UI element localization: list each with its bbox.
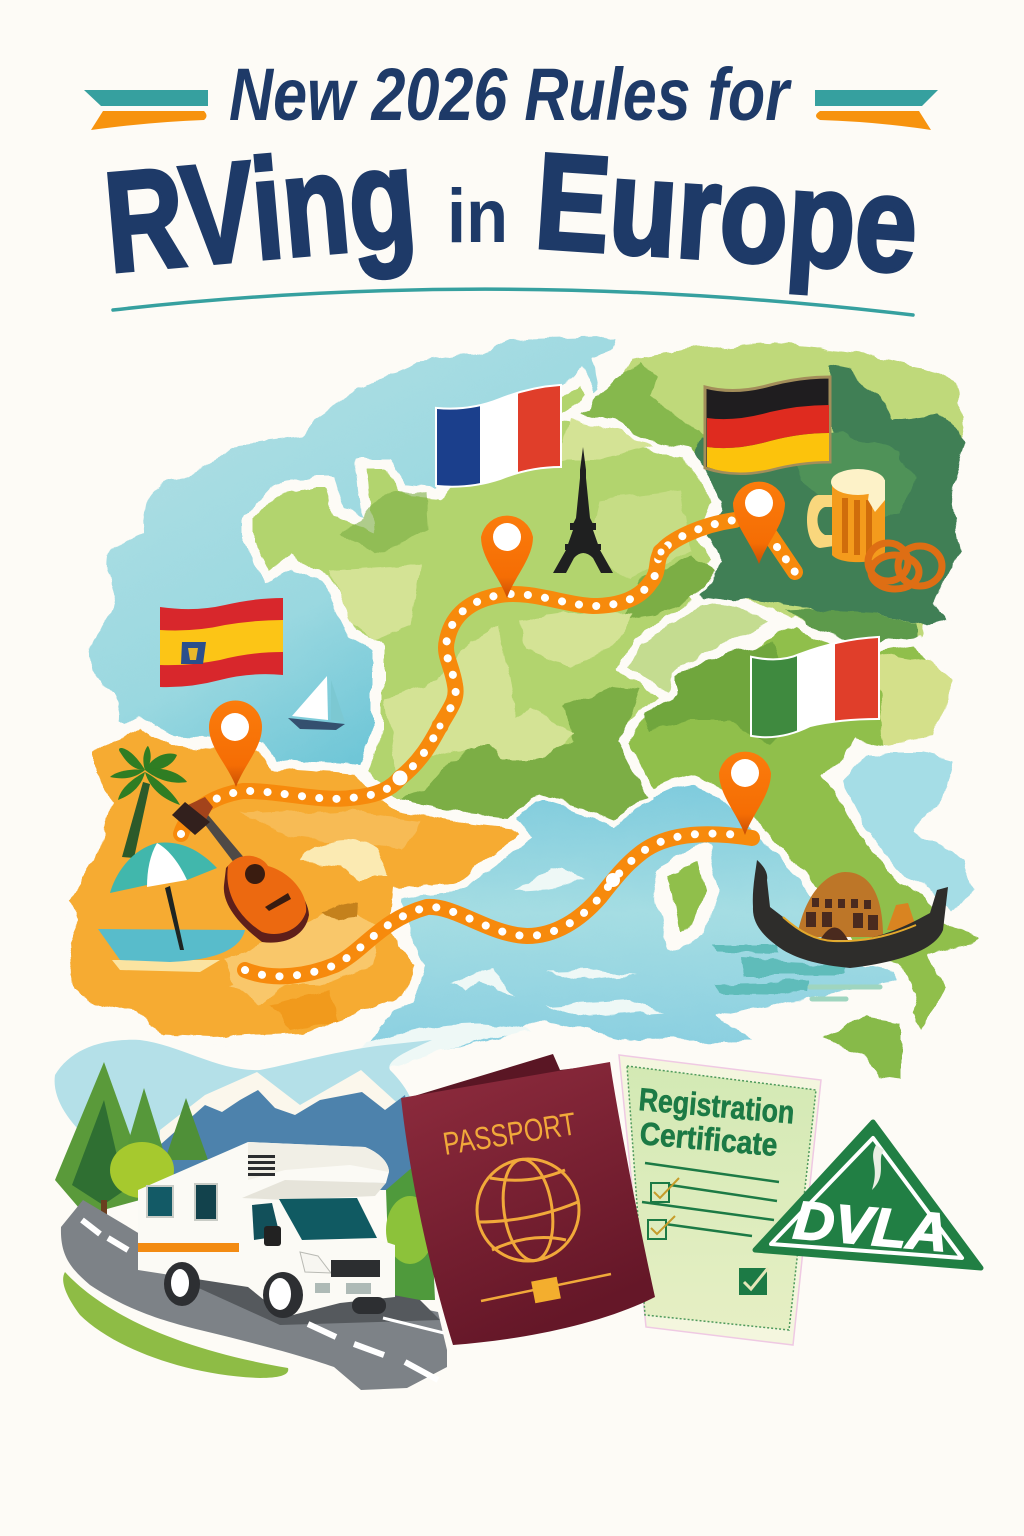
route: Spain to Germany: [181, 520, 735, 834]
pin: Germany: [733, 482, 785, 564]
infographic canvas: [54, 66, 984, 1390]
DVLA badge: [755, 1122, 981, 1268]
icon: sailboat: [288, 676, 345, 730]
camper door window: [252, 1203, 280, 1240]
certificate checkboxes: [648, 1178, 679, 1239]
Corsica: [660, 850, 712, 945]
certificate lines: [642, 1163, 779, 1236]
ribbon: right: [815, 90, 938, 130]
trees behind passport: [386, 1165, 435, 1300]
icon: gondola and colosseum: [753, 860, 948, 968]
land: France: [250, 377, 717, 826]
title underline: [113, 289, 913, 315]
land: Spain: [62, 722, 525, 1042]
registration certificate: [619, 1055, 821, 1345]
ribbon: left: [84, 90, 208, 130]
sky blob: [55, 1040, 432, 1190]
icon: Eiffel Tower: [553, 447, 613, 573]
icon: palm tree: [110, 746, 187, 858]
flag: Germany: [705, 377, 830, 474]
sea foam shapes: [350, 868, 665, 1075]
camper roof shade: [248, 1142, 389, 1180]
grass verge: [63, 1272, 288, 1378]
map of Europe: [62, 337, 987, 1080]
route: Germany tail: [770, 535, 795, 572]
icon: pretzels: [868, 543, 942, 589]
heading: in: in: [447, 174, 508, 259]
sea: north west: [90, 337, 617, 780]
icon: globe: [477, 1156, 579, 1264]
mountains: [160, 1070, 420, 1190]
Sicily: [823, 1017, 900, 1080]
camper side window: [195, 1184, 217, 1220]
Italy: dark green: [643, 640, 800, 745]
teal water streaks: [712, 945, 850, 993]
waves under gondola: [810, 987, 880, 999]
land: north mid green: [575, 362, 705, 458]
certificate stamp: [739, 1268, 768, 1295]
camper vent: [248, 1155, 275, 1176]
camper headlight: [300, 1252, 331, 1273]
route: Spain coast to Italy: [245, 834, 752, 976]
passport label: PASSPORT: [440, 1105, 578, 1162]
heading: RVing: RVing: [99, 117, 422, 303]
Italy: pale right region: [877, 653, 955, 745]
title block: [84, 53, 938, 315]
trees: [55, 1062, 208, 1224]
pin: Spain: [209, 701, 262, 787]
camper far wheel: [352, 1297, 386, 1314]
Spain: pale cloud: [300, 841, 390, 877]
camper front wheel: [263, 1272, 303, 1318]
Spain: darker orange patch: [270, 990, 340, 1030]
badge text: DVLA: [791, 1190, 951, 1263]
pin: France: [481, 516, 533, 598]
map land and sea shapes: [62, 337, 987, 1080]
camper mirror: [264, 1226, 281, 1246]
heading: Europe: Europe: [531, 124, 922, 301]
land: Italy: [623, 622, 987, 1040]
camper grille: [331, 1260, 380, 1277]
camper body: [138, 1142, 395, 1317]
sea: adriatic: [840, 753, 973, 910]
Spain: light sand patches: [225, 810, 420, 1005]
land: Alpine pale region: [623, 600, 775, 697]
land: northern region: [575, 340, 967, 655]
land: Germany dark forest: [690, 365, 967, 628]
passport: [401, 1054, 655, 1345]
camper orange stripe: [138, 1243, 239, 1252]
flag: Spain: [160, 598, 283, 687]
passport emblem: [481, 1274, 611, 1303]
France: darker green patches: [340, 490, 715, 826]
badge flame: [872, 1145, 884, 1190]
icon: guitar: [172, 797, 309, 943]
Spain: brown patch: [323, 900, 358, 922]
sea: mediterranean: [350, 785, 905, 1070]
camper rear wheel: [164, 1262, 200, 1306]
certificate heading: [637, 1081, 796, 1163]
travel scene: [55, 1040, 981, 1390]
certificate heading: Certificate: [638, 1115, 779, 1163]
icon: beach umbrella and water: [98, 842, 245, 972]
certificate heading: Registration: [637, 1081, 796, 1131]
camper overhead shade: [242, 1180, 386, 1200]
road: [61, 1200, 447, 1390]
camper front bumper: [315, 1283, 371, 1294]
land: lower forest green: [787, 610, 917, 655]
flag: Italy: [752, 630, 878, 740]
pin: Italy: [719, 752, 771, 835]
land: Germany mid green: [790, 432, 915, 520]
camper van: [138, 1142, 395, 1318]
camper rear window: [147, 1186, 173, 1217]
flag: France: [437, 380, 560, 490]
camper windscreen: [279, 1198, 377, 1240]
icon: beer mug: [807, 469, 885, 562]
France: pale green patches: [330, 420, 690, 770]
heading line one: New 2026 Rules for: [229, 53, 792, 136]
